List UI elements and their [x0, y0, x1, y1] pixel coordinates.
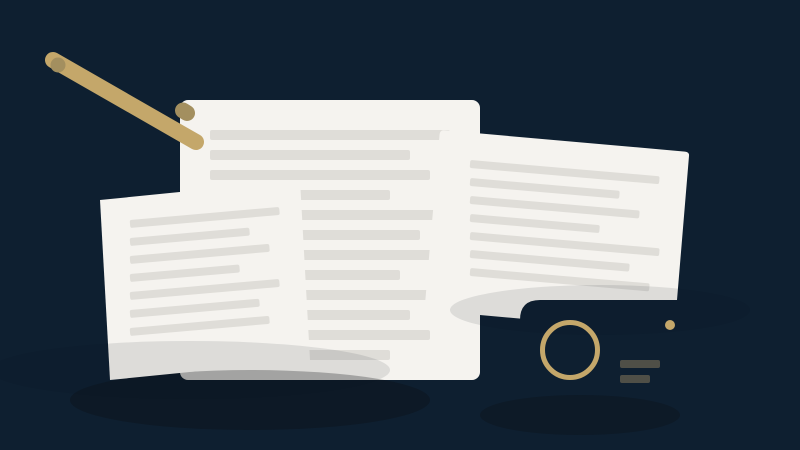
- left page curl shadow: [0, 341, 390, 399]
- left document: [100, 180, 310, 380]
- dark device body: [520, 300, 680, 390]
- right page curl shadow: [450, 285, 750, 335]
- icon: gold dot: [665, 320, 675, 330]
- icon: gold ring: [542, 322, 598, 378]
- shadow under main document: [70, 370, 430, 430]
- wand tip blob: [183, 110, 187, 113]
- main document: [180, 100, 480, 380]
- right document: [424, 130, 689, 332]
- shadow under right device: [480, 395, 680, 435]
- gold wand: [50, 58, 196, 142]
- device label bars: [620, 360, 660, 383]
